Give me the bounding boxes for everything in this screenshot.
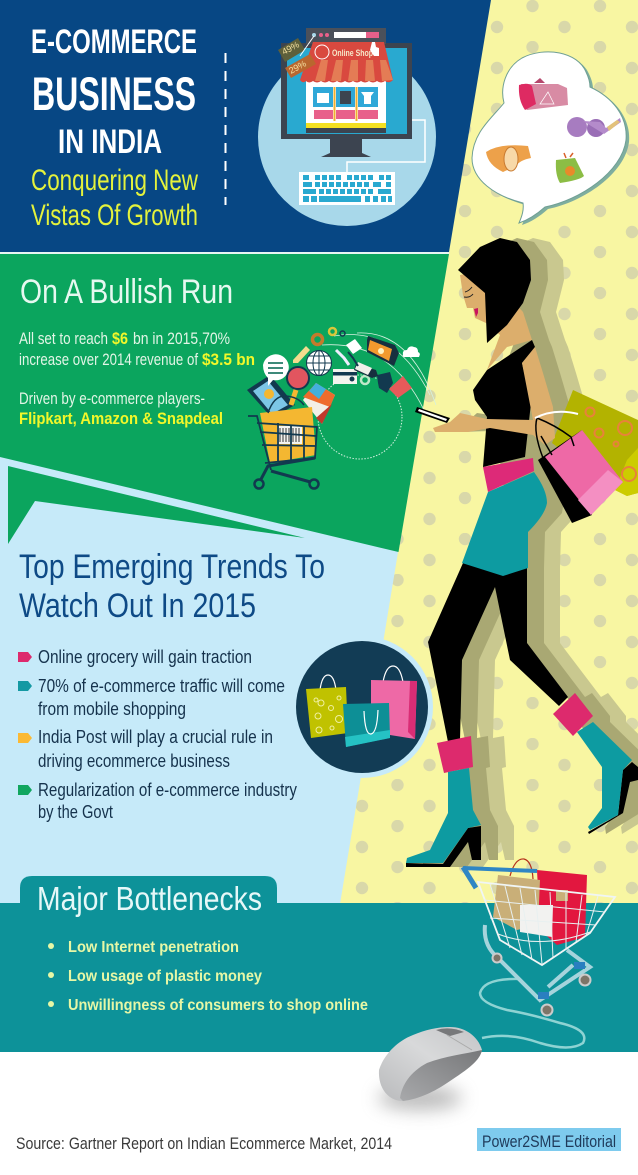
illustration: woman with shopping bags: [406, 238, 638, 867]
tab heading: major bottlenecks: Major Bottlenecks: [37, 880, 262, 917]
trend 3: [18, 727, 273, 771]
illustration: computer mouse: [378, 1027, 482, 1110]
section heading: on a bullish run: On A Bullish Run: [20, 273, 233, 311]
bullish run text: Driven by e-commerce players-: [19, 389, 205, 408]
bottlenecks list: Unwillingness of consumers to shop online: [68, 997, 368, 1014]
subtitle: Vistas Of Growth: [31, 199, 198, 232]
bullish run text: bn in 2015,70%: [133, 329, 230, 348]
icon: green coin purse: [556, 153, 584, 183]
icon: online shop computer: 49%: [280, 39, 301, 57]
trends list: [18, 647, 297, 822]
source line: Source: Gartner Report on Indian Ecommerce Market, 2014: [16, 1135, 392, 1153]
bullish run text: [19, 329, 255, 428]
icon: purple sunglasses: [567, 117, 621, 137]
editorial badge: Power2SME Editorial: [482, 1133, 616, 1151]
trend 4: Regularization of e-commerce industry: [38, 780, 297, 800]
bullish run text: All set to reach: [19, 329, 108, 348]
icon: online shop computer: 29%: [287, 58, 308, 76]
bottlenecks list: Low Internet penetration: [68, 939, 239, 956]
icon: shopping bags in circle: [291, 636, 433, 778]
icon: orange watch: [486, 145, 531, 172]
legs: [428, 563, 568, 742]
pink bag: [535, 412, 623, 523]
panel: bullish run: [0, 254, 449, 552]
phone: [415, 407, 450, 423]
shadows of woman: [423, 238, 638, 867]
icon: online shop computer: [258, 28, 436, 226]
belt: [483, 458, 534, 492]
illustration: shopping cart: [463, 859, 615, 1048]
bottlenecks list: Low usage of plastic money: [68, 968, 262, 985]
trend 2: [18, 676, 285, 719]
bottlenecks list: [48, 939, 368, 1014]
trend 1: Online grocery will gain traction: [38, 647, 252, 667]
header divider: [0, 252, 449, 254]
section heading: top emerging trends: Top Emerging Trends To: [19, 548, 325, 586]
title: IN INDIA: [58, 123, 162, 161]
illustration: shopping cart with floating icons: [247, 328, 436, 488]
arm: [433, 347, 555, 445]
trend 2: 70% of e-commerce traffic will come: [38, 676, 285, 696]
bullish run text: Flipkart, Amazon & Snapdeal: [19, 409, 223, 428]
trend 3: India Post will play a crucial rule in: [38, 727, 273, 747]
yellow-green bag: [552, 390, 638, 496]
background: yellow polka-dot panel: [330, 0, 638, 904]
trend 2: from mobile shopping: [38, 699, 186, 719]
trend 4: by the Govt: [38, 802, 113, 822]
icon: pink wallet: [519, 78, 568, 110]
subtitle: [31, 164, 198, 232]
title: BUSINESS: [32, 67, 196, 120]
hair: [458, 238, 531, 343]
subtitle: Conquering New: [31, 164, 198, 197]
bullish run text: $3.5 bn: [202, 350, 255, 369]
left boot: [406, 768, 481, 867]
bullish run text: $6: [112, 329, 128, 348]
section heading: top emerging trends: Watch Out In 2015: [19, 587, 256, 625]
face and neck: [460, 270, 532, 370]
background: light blue trends panel: [0, 450, 400, 904]
speech bubble with accessories: [472, 52, 629, 225]
left cuff: [437, 736, 473, 773]
section heading: top emerging trends: [19, 548, 325, 625]
panel: header: [0, 0, 491, 252]
right boot: [577, 722, 638, 834]
panel: green fold wedge: [8, 466, 305, 544]
trend 3: driving ecommerce business: [38, 751, 230, 771]
skirt: [462, 472, 547, 576]
lips and eye: [464, 287, 478, 317]
editorial badge: [477, 1128, 621, 1151]
panel: major bottlenecks band: [0, 876, 638, 1052]
trend 4: [18, 780, 297, 822]
icon: online shop computer: Online Shop: [332, 48, 373, 58]
title: E-COMMERCE: [31, 23, 197, 61]
top: [473, 340, 535, 467]
title: [31, 23, 197, 161]
dashed separator: [224, 53, 226, 205]
bullish run text: increase over 2014 revenue of: [19, 350, 198, 369]
right cuff: [553, 693, 593, 736]
